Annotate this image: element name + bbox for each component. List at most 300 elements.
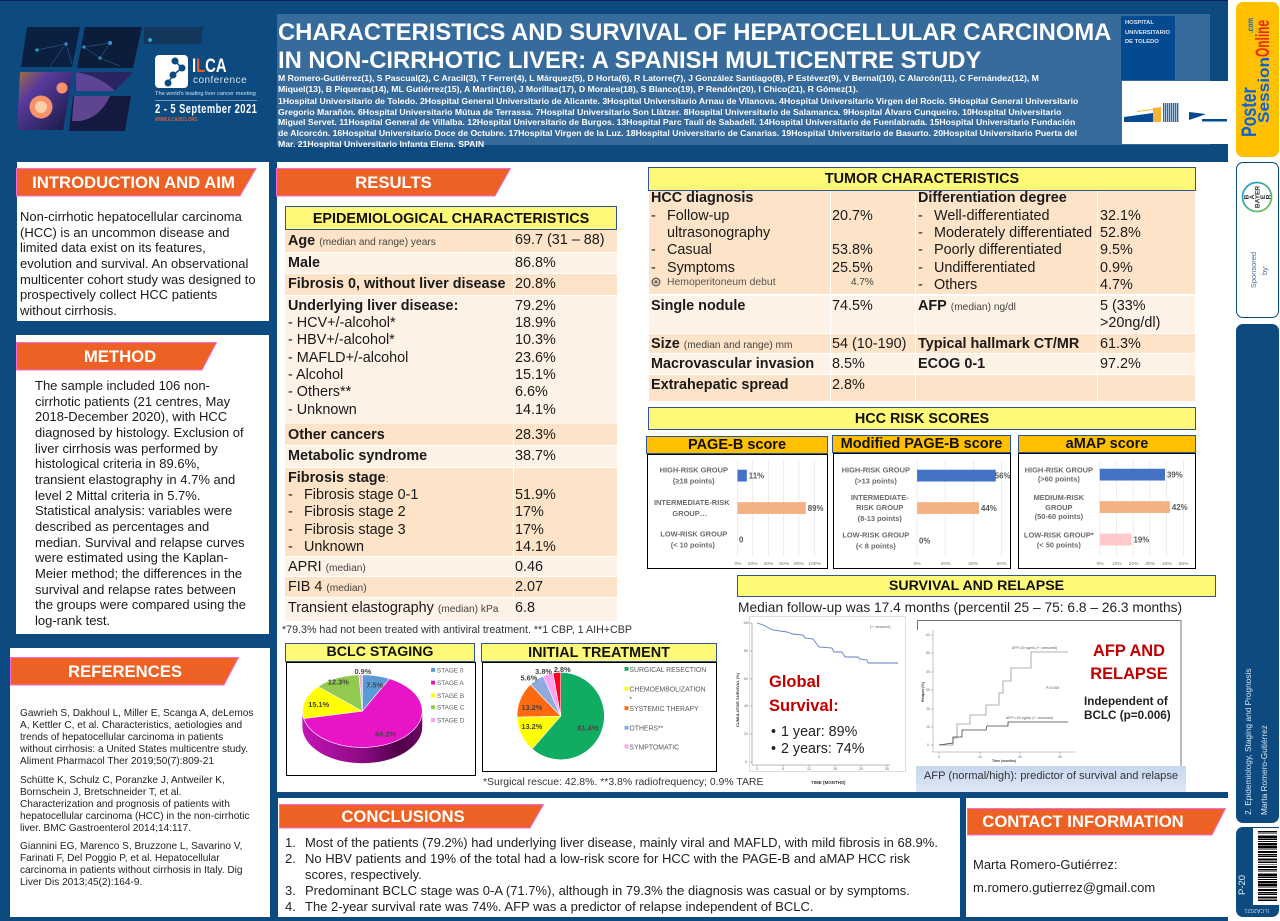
panel: references <box>10 648 270 917</box>
hospital logo: UNIVERSITARIO <box>1125 30 1170 36</box>
table: epidemiological characteristics: Unknown <box>304 539 364 555</box>
sponsor box <box>1236 162 1279 318</box>
table: epidemiological characteristics: FIB 4 (median) <box>288 579 367 595</box>
authors: Miquel(13), B Piqueras(14), ML Gutiérrez(15), A Martin(16), J Morillas(17), D Morales(18), S Blanco(19), P Rendón(20), I Chico(21), R Gómez(1). <box>278 84 858 94</box>
icon: Bayer logo <box>1242 182 1272 212</box>
table: tumor characteristics: 74.5% <box>832 298 873 314</box>
chart: relapse by AFP: AFP<=20 ng/mL (+: censored) <box>1006 716 1053 720</box>
affiliations: Mar. 21Hospital Universitario Infanta Elena. SPAIN <box>278 139 484 149</box>
table: epidemiological characteristics: 79.2% <box>515 298 556 314</box>
bar chart: aMAP: 42% <box>1172 503 1188 512</box>
table: epidemiological characteristics: 38.7% <box>515 448 556 464</box>
table: tumor characteristics: 0.9% <box>1100 260 1133 276</box>
reference 1 <box>20 708 254 767</box>
table: tumor characteristics: 5 (33% <box>1100 298 1146 314</box>
table: epidemiological characteristics: 86.8% <box>515 255 556 271</box>
authors: M Romero-Gutiérrez(1), S Pascual(2), C Aracil(3), T Ferrer(4), L Márquez(5), D Horta(6), R Latorre(7), J González Santiago(8), P Estévez(9), V Bernal(10), C Alarcón(11), C Fernández(12), M <box>278 73 1039 83</box>
heading: survival and relapse <box>737 575 1216 597</box>
title: CHARACTERISTICS AND SURVIVAL OF HEPATOCELLULAR CARCINOMA <box>278 19 1111 46</box>
list: survival rates: 1 year: 89% <box>781 724 857 740</box>
bar chart: aMAP: LOW-RISK GROUP* <box>1024 531 1094 540</box>
bar chart: PAGE-B: (< 10 points) <box>671 540 715 549</box>
chart: global survival curve: 30 <box>885 767 889 771</box>
text: independent of BCLC: BCLC (p=0.006) <box>1084 709 1171 722</box>
table: epidemiological characteristics: - <box>288 539 293 555</box>
chart: relapse by AFP: Relapse (%) <box>921 682 925 702</box>
pie chart: BCLC staging: 7.5% <box>366 681 383 690</box>
barcode <box>1253 828 1279 905</box>
bar chart: PAGE-B <box>647 454 828 569</box>
reference 1: Gawrieh S, Dakhoul L, Miller E, Scanga A, deLemos <box>20 708 253 719</box>
poster number and ID: ILCA2021 <box>1245 907 1269 913</box>
text: sponsored by: Sponsored <box>1249 252 1258 288</box>
table: epidemiological characteristics: 6.6% <box>515 384 548 400</box>
bar chart: Modified PAGE-B: 20% <box>941 561 951 567</box>
text: introduction <box>20 209 256 318</box>
panel: introduction <box>17 162 269 321</box>
table: epidemiological characteristics: 17% <box>515 522 544 538</box>
table: tumor characteristics: AFP (median) ng/dl <box>918 298 1016 314</box>
text: contact name and email: Marta Romero-Gutiérrez: <box>973 857 1117 872</box>
reference 1: Aliment Pharmacol Ther 2019;50(7):809-21 <box>20 756 214 767</box>
table: epidemiological characteristics: Male <box>288 255 320 271</box>
heading: conclusions <box>279 804 544 828</box>
table: epidemiological characteristics: Metabolic syndrome <box>288 448 427 464</box>
table: epidemiological characteristics: Fibrosis stage 0-1 <box>304 487 418 503</box>
authors <box>278 73 1039 94</box>
chart: relapse by AFP: 10 <box>926 725 930 729</box>
bar chart: Modified PAGE-B: (>13 points) <box>855 476 897 485</box>
pie chart: initial treatment: 5.6% <box>520 674 538 683</box>
text: introduction: evolution and survival. An observational <box>20 256 248 271</box>
bar chart: Modified PAGE-B: LOW-RISK GROUP <box>842 531 909 540</box>
table: epidemiological characteristics: Underlying liver disease: <box>288 298 458 314</box>
table: epidemiological characteristics: - <box>288 522 293 538</box>
table: epidemiological characteristics: 6.8 <box>515 600 535 616</box>
text: independent of BCLC: Independent of <box>1084 695 1168 708</box>
table: epidemiological characteristics: APRI (median) <box>288 559 366 575</box>
chart: global survival curve: 6 <box>782 767 784 771</box>
table: epidemiological characteristics: - Unknown <box>288 402 357 418</box>
text: method: transient elastography in 4.7% and <box>35 472 235 487</box>
label: AFP and relapse heading: AFP AND <box>1093 642 1165 660</box>
table: tumor characteristics: Typical hallmark CT/MR <box>918 336 1079 352</box>
table: tumor characteristics: ultrasonography <box>667 225 770 241</box>
badge: PosterSessionOnline: Online <box>1252 20 1273 57</box>
table: tumor characteristics: 97.2% <box>1100 356 1141 372</box>
bar chart: Modified PAGE-B: 60% <box>997 561 1007 567</box>
text: method: histological criteria in 89.6%, <box>35 456 200 471</box>
poster number and ID: P-20 <box>1237 875 1248 895</box>
text: introduction: limited data exist on its features, <box>20 240 206 255</box>
heading: initial treatment: INITIAL TREATMENT <box>528 645 670 661</box>
reference 3: Farinati F, Del Poggio P, et al. Hepatocellular <box>20 853 220 864</box>
pie chart: initial treatment: OTHERS** <box>629 726 664 733</box>
table: epidemiological characteristics: 2.07 <box>515 579 543 595</box>
table: epidemiological characteristics: 20.8% <box>515 276 556 292</box>
chart: global survival curve: 40 <box>744 704 748 708</box>
chart: global survival curve: 20 <box>744 732 748 736</box>
text: introduction: Non-cirrhotic hepatocellular carcinoma <box>20 209 242 224</box>
affiliations: de Alcorcón. 16Hospital Universitario Doce de Octubre. 17Hospital Virgen de la Luz. 18Hospital Universitario de Canarias. 19Hospital Universitario de Basurto. 20Hospital Universitario Puerta del <box>278 128 1077 138</box>
table: epidemiological characteristics: Age (median and range) years <box>288 233 436 249</box>
callout: AFP predictor: AFP (normal/high): predictor of survival and relapse <box>924 770 1178 782</box>
table: tumor characteristics: 53.8% <box>832 242 873 258</box>
heading: references <box>10 657 239 686</box>
table: epidemiological characteristics: 51.9% <box>515 487 556 503</box>
reference 1: trends of hepatocellular carcinoma in patients <box>20 732 223 743</box>
bar chart: Modified PAGE-B: (< 8 points) <box>856 541 896 550</box>
bar chart: aMAP: HIGH-RISK GROUP <box>1025 466 1093 475</box>
table: epidemiological characteristics: 0.46 <box>515 559 543 575</box>
title <box>278 19 1111 74</box>
panel: conclusions <box>278 798 960 917</box>
icon: Bayer logo: R <box>1266 194 1272 199</box>
conference logo: conference <box>193 75 247 86</box>
text: introduction: (HCC) is an uncommon disease and <box>20 225 230 240</box>
badge: PosterSessionOnline: Session <box>1256 57 1273 123</box>
chart: global survival curve: 60 <box>744 677 748 681</box>
pie chart: initial treatment: 61.4% <box>577 724 599 733</box>
footnote: epidemiology: *79.3% had not been treated with antiviral treatment. **1 CBP, 1 AIH+CBP <box>282 624 632 636</box>
table: tumor characteristics: Follow-up <box>667 208 729 224</box>
conference logo: WWW.ILCA2021.ORG <box>155 117 198 123</box>
chart: relapse by AFP: Time (months) <box>992 759 1016 763</box>
heading: method <box>16 342 217 370</box>
pie chart: initial treatment <box>482 662 717 772</box>
table: epidemiological characteristics: Other cancers <box>288 427 385 443</box>
chart: global survival curve: CUMULATIVE SURVIVAL (%) <box>735 672 740 727</box>
table: tumor characteristics: 2.8% <box>832 377 865 393</box>
pie chart: BCLC staging <box>286 662 476 776</box>
bar chart: PAGE-B: GROUP… <box>672 509 707 518</box>
table: epidemiological characteristics: 69.7 (31 – 88) <box>515 232 605 248</box>
table: tumor characteristics: 52.8% <box>1100 225 1141 241</box>
heading: results: RESULTS <box>355 173 432 192</box>
table: epidemiological characteristics <box>285 230 617 621</box>
badge: PosterSessionOnline: .com <box>1246 18 1255 33</box>
callout: AFP predictor <box>916 766 1186 792</box>
reference 3: Giannini EG, Marenco S, Bruzzone L, Savarino V, <box>20 841 242 852</box>
reference 3: Liver Dis 2013;45(2):164-9. <box>20 877 142 888</box>
list: conclusions: Predominant BCLC stage was 0-A (71.7%), although in 79.3% the diagnosis was casual or by symptoms. <box>305 883 910 898</box>
list: survival rates: 2 years: 74% <box>781 740 864 756</box>
bar chart: PAGE-B: (≥18 points) <box>673 476 715 485</box>
table: tumor characteristics: Hemoperitoneum debut <box>667 277 776 288</box>
chart: global survival curve: 24 <box>859 767 863 771</box>
table: epidemiological characteristics: - Others** <box>288 384 351 400</box>
bar chart: aMAP: (>60 points) <box>1038 475 1080 484</box>
pie chart: initial treatment: 13.2% <box>521 722 543 731</box>
icon: Bayer logo: BAYER <box>1254 186 1262 208</box>
bar chart: aMAP: 39% <box>1167 471 1183 480</box>
chart: global survival curve: 100 <box>743 621 749 625</box>
text: introduction: prospectively collect HCC patients <box>20 287 217 302</box>
heading: BCLC staging: BCLC STAGING <box>327 644 433 660</box>
bar chart: Modified PAGE-B: 56% <box>995 472 1010 481</box>
table: tumor characteristics: 61.3% <box>1100 336 1141 352</box>
bar chart: Modified PAGE-B: 40% <box>968 561 979 567</box>
bar chart: PAGE-B: 100% <box>808 561 822 567</box>
heading: conclusions: CONCLUSIONS <box>341 807 465 826</box>
pie chart: initial treatment: 3.8% <box>535 667 552 676</box>
bar chart: PAGE-B: 11% <box>749 472 764 481</box>
panel: contact information <box>966 798 1228 917</box>
text: session and author: Marta Romero-Gutiérrez <box>1259 725 1269 815</box>
list: conclusions: No HBV patients and 19% of the total had a low-risk score for HCC with the PAGE-B and aMAP HCC risk <box>305 851 910 866</box>
table: tumor characteristics: ECOG 0-1 <box>918 356 985 372</box>
conference logo <box>17 27 257 131</box>
bar chart: PAGE-B: 0 <box>739 535 744 544</box>
conference logo: The world's leading liver cancer meeting <box>155 91 256 97</box>
bar chart: PAGE-B: HIGH-RISK GROUP <box>660 466 728 475</box>
chart: global survival curve: 0 <box>745 760 747 764</box>
pie chart: BCLC staging: STAGE C <box>437 705 465 712</box>
table: epidemiological characteristics: 14.1% <box>515 402 556 418</box>
badge: PosterSessionOnline <box>1236 2 1279 157</box>
pie chart: initial treatment: 2.8% <box>554 665 571 674</box>
list: survival rates: • <box>771 724 776 740</box>
bar chart: aMAP: (50-60 points) <box>1035 512 1084 521</box>
table: epidemiological characteristics: - MAFLD+/-alcohol <box>288 350 408 366</box>
text: method: described as percentages and <box>35 519 209 534</box>
list: conclusions: The 2-year survival rate was 74%. AFP was a predictor of relapse independent of BCLC. <box>305 899 813 914</box>
heading: survival and relapse: SURVIVAL AND RELAPSE <box>889 578 1064 594</box>
text: method: Statistical analysis: variables were <box>35 503 232 518</box>
conference logo: ILCA <box>192 56 227 77</box>
affiliations: Miguel Servet. 11Hospital General de Villalba. 12Hospital Universitario de Burgos. 13Hospital Parc Taulí de Sabadell. 14Hospital Universitario de Fuenlabrada. 15Hospital Universitario Fundación <box>278 117 1075 127</box>
text: independent of BCLC <box>1084 695 1171 722</box>
chart: relapse by AFP <box>917 620 1182 766</box>
pie chart: BCLC staging: 15.1% <box>308 700 330 709</box>
reference 2 <box>20 775 250 834</box>
bar chart: PAGE-B: 60% <box>779 561 790 567</box>
bar chart: aMAP: (< 50 points) <box>1037 540 1081 549</box>
text: method: survival and relapse rates between <box>35 582 236 597</box>
table: epidemiological characteristics: Fibrosis stage 3 <box>304 522 406 538</box>
pie chart: BCLC staging: STAGE 0 <box>437 667 464 674</box>
table: tumor characteristics: 8.5% <box>832 356 865 372</box>
text: method: cirrhotic patients (21 centres, May <box>35 394 230 409</box>
affiliations: Gregorio Marañón. 6Hospital Universitario Mútua de Terrassa. 7Hospital Universitario Son Llàtzer. 8Hospital Universitario de Salamanca. 9Hospital Álvaro Cunqueiro. 10Hospital Universitario <box>278 107 1061 117</box>
chart: relapse by AFP: 20 <box>1018 755 1022 759</box>
pie chart: BCLC staging: 64.2% <box>375 730 396 739</box>
icon: Bayer logo: A <box>1249 194 1256 199</box>
table: tumor characteristics: Extrahepatic spread <box>651 377 789 393</box>
label: AFP and relapse heading <box>1090 642 1168 683</box>
text: method: were estimated using the Kaplan- <box>35 550 228 565</box>
table: epidemiological characteristics: - <box>288 504 293 520</box>
text: session and author <box>1243 668 1269 815</box>
bar chart: Modified PAGE-B: 44% <box>981 504 997 513</box>
table: epidemiological characteristics: - HBV+/-alcohol* <box>288 332 395 348</box>
bar chart: PAGE-B: INTERMEDIATE-RISK <box>654 498 730 507</box>
bar chart: aMAP: 30% <box>1145 561 1156 567</box>
list: conclusions: 2. <box>285 851 296 866</box>
bar chart: PAGE-B: 89% <box>808 504 823 513</box>
text: session and author: 2. Epidemiology, Staging and Prognosis <box>1243 668 1253 815</box>
heading: BCLC staging <box>285 643 475 662</box>
bar chart: aMAP <box>1018 453 1196 569</box>
text: contact name and email: m.romero.gutierrez@gmail.com <box>973 880 1155 895</box>
pie chart: initial treatment: SYMPTOMATIC <box>629 744 679 751</box>
chart: relapse by AFP: 40 <box>926 670 930 674</box>
bar chart: Modified PAGE-B: 0% <box>914 561 921 567</box>
bar chart: aMAP: MEDIUM-RISK <box>1034 493 1085 502</box>
chart: relapse by AFP: 0 <box>927 743 929 747</box>
reference 2: Schütte K, Schulz C, Poranzke J, Antweiler K, <box>20 775 225 786</box>
pie chart: initial treatment: CHEMOEMBOLIZATION <box>629 686 706 693</box>
bar chart: Modified PAGE-B: HIGH-RISK GROUP <box>842 466 910 475</box>
heading: HCC risk scores <box>648 407 1196 430</box>
table: tumor characteristics: - <box>918 260 923 276</box>
bar chart: PAGE-B: 80% <box>794 561 804 567</box>
chart: relapse by AFP: 0 <box>938 755 940 759</box>
chart: relapse by AFP: 30 <box>926 688 930 692</box>
bar chart: aMAP: 50% <box>1179 561 1189 567</box>
chart: relapse by AFP: 20 <box>926 707 930 711</box>
table: tumor characteristics: - <box>651 260 656 276</box>
pie chart: initial treatment: SYSTEMIC THERAPY <box>629 706 699 713</box>
table: tumor characteristics: 4.7% <box>851 277 874 288</box>
table: epidemiological characteristics: Fibrosis stage: <box>288 470 388 486</box>
text: method: the groups were compared using the <box>35 597 246 612</box>
text: method: Meier method; the differences in the <box>35 566 242 581</box>
list: conclusions: Most of the patients (79.2%) had underlying liver disease, mainly viral and MAFLD, with mild fibrosis in 68.9%. <box>305 835 938 850</box>
text: method: liver cirrhosis was performed by <box>35 441 218 456</box>
table: tumor characteristics: 20.7% <box>832 208 873 224</box>
bar chart: Modified PAGE-B <box>833 453 1011 569</box>
logo: ILCA mark <box>155 55 188 88</box>
footnote: treatment: *Surgical rescue: 42.8%. **3.8% radiofrequency; 0.9% TARE <box>483 777 763 788</box>
table: epidemiological characteristics: 14.1% <box>515 539 556 555</box>
heading: aMAP score <box>1018 435 1196 453</box>
bar chart: aMAP: 0% <box>1097 561 1104 567</box>
table: epidemiological characteristics: 18.9% <box>515 315 556 331</box>
bar chart: aMAP: 40% <box>1162 561 1172 567</box>
chart: global survival curve: 0 <box>756 767 758 771</box>
text: method: diagnosed by histology. Exclusion of <box>35 425 244 440</box>
affiliations <box>278 96 1078 149</box>
title: IN NON-CIRRHOTIC LIVER: A SPANISH MULTICENTRE STUDY <box>278 47 981 74</box>
chart: global survival curve <box>735 616 906 785</box>
text: sponsored by: by: <box>1260 265 1269 275</box>
bar chart: PAGE-B: 40% <box>764 561 774 567</box>
pie chart: BCLC staging: STAGE B <box>437 693 464 700</box>
table: epidemiological characteristics: - HCV+/-alcohol* <box>288 315 396 331</box>
table: tumor characteristics: 54 (10-190) <box>832 336 906 352</box>
table: epidemiological characteristics: - <box>288 487 293 503</box>
heading: epidemiological characteristics <box>285 206 617 230</box>
reference 2: hepatocellular carcinoma (HCC) in the non-cirrhotic <box>20 811 249 822</box>
callout: AFP and relapse <box>1084 642 1171 722</box>
table: epidemiological characteristics: 10.3% <box>515 332 556 348</box>
list: conclusions <box>285 835 938 914</box>
table: tumor characteristics: - <box>918 225 923 241</box>
reference 3: carcinoma in patients without cirrhosis in Italy. Dig <box>20 865 243 876</box>
chart: relapse by AFP: 10 <box>978 755 982 759</box>
bar chart: aMAP: GROUP <box>1045 503 1073 512</box>
table: tumor characteristics: Casual <box>667 242 712 258</box>
heading: introduction and aim: INTRODUCTION AND AIM <box>32 173 235 192</box>
heading: results <box>276 168 511 196</box>
pie chart: BCLC staging: STAGE D <box>437 717 465 724</box>
table: epidemiological characteristics: Transient elastography (median) kPa <box>288 600 498 616</box>
list: conclusions: 3. <box>285 883 296 898</box>
label: global survival heading <box>769 673 839 715</box>
bar chart: Modified PAGE-B: RISK GROUP <box>856 503 903 512</box>
hospital logo: HOSPITAL <box>1125 20 1154 26</box>
heading: tumor characteristics <box>648 167 1196 191</box>
heading: contact information <box>967 808 1226 836</box>
reference 2: Bornschein J, Bretschneider T, et al. <box>20 787 181 798</box>
text: introduction: without cirrhosis. <box>20 303 117 318</box>
table: tumor characteristics: Well-differentiated <box>934 208 1049 224</box>
table: tumor characteristics: Undifferentiated <box>934 260 1035 276</box>
text: method: median. Survival and relapse curves <box>35 535 245 550</box>
chart: relapse by AFP: AFP>20 ng/mL (+: censored) <box>1012 646 1057 650</box>
hospital logo <box>1116 14 1228 145</box>
text: method: level 2 Mittal criteria in 5.7%. <box>35 488 200 503</box>
table: epidemiological characteristics: Fibrosis stage 2 <box>304 504 406 520</box>
text: method <box>35 378 246 628</box>
bar chart: Modified PAGE-B: (8-13 points) <box>858 514 902 523</box>
table: epidemiological characteristics: 17% <box>515 504 544 520</box>
heading: tumor characteristics: TUMOR CHARACTERISTICS <box>825 171 1019 187</box>
table: tumor characteristics: - <box>918 242 923 258</box>
list: conclusions: scores, respectively. <box>305 867 422 882</box>
table: tumor characteristics: 25.5% <box>832 260 873 276</box>
text: median follow-up: Median follow-up was 17.4 months (percentil 25 – 75: 6.8 – 26.3 months) <box>738 600 1182 615</box>
table: tumor characteristics: Differentiation degree <box>918 190 1067 206</box>
badge: PosterSessionOnline: Poster <box>1238 87 1262 137</box>
pie chart: BCLC staging: 12.3% <box>328 678 349 687</box>
affiliations: 1Hospital Universitario de Toledo. 2Hospital General Universitario de Alicante. 3Hospital Universitario Arnau de Vilanova. 4Hospital Universitario Virgen del Rocío. 5Hospital General Universitario <box>278 96 1078 106</box>
heading: method: METHOD <box>84 347 156 366</box>
bar chart: Modified PAGE-B: INTERMEDIATE- <box>851 493 909 502</box>
table: epidemiological characteristics: 28.3% <box>515 427 556 443</box>
pie chart: BCLC staging: STAGE A <box>437 680 465 687</box>
reference 3 <box>20 841 243 888</box>
chart: relapse by AFP: 50 <box>926 651 930 655</box>
bar chart: PAGE-B: 20% <box>748 561 758 567</box>
heading: PAGE-B score <box>646 436 828 454</box>
list: conclusions: 4. <box>285 899 296 914</box>
heading: HCC risk scores: HCC RISK SCORES <box>855 411 989 427</box>
panel: results <box>277 162 1228 792</box>
heading: PAGE-B score: PAGE-B score <box>688 437 786 453</box>
chart: relapse by AFP: 30 <box>1058 755 1062 759</box>
reference 1: without cirrhosis: a United States multicentre study. <box>20 744 248 755</box>
icon: Bayer logo: B <box>1244 194 1250 199</box>
pie chart: initial treatment: 13.2% <box>521 703 543 712</box>
chart: global survival curve: 18 <box>833 767 837 771</box>
callout: global survival <box>769 673 864 756</box>
pie chart: initial treatment: * <box>629 696 632 703</box>
table: tumor characteristics: Symptoms <box>667 260 735 276</box>
table: tumor characteristics: - <box>651 208 656 224</box>
table: tumor characteristics: Macrovascular invasion <box>651 356 814 372</box>
table: epidemiological characteristics: - Alcohol <box>288 367 343 383</box>
table: tumor characteristics <box>649 190 1195 401</box>
title band <box>277 14 1116 145</box>
heading: initial treatment <box>481 643 717 662</box>
label: global survival heading: Global <box>769 673 820 691</box>
bar chart: aMAP: 10% <box>1112 561 1122 567</box>
table: tumor characteristics: 4.7% <box>1100 277 1133 293</box>
chart: global survival curve: TIME (MONTHS) <box>811 780 846 785</box>
heading: Modified PAGE-B score: Modified PAGE-B score <box>841 436 1002 452</box>
